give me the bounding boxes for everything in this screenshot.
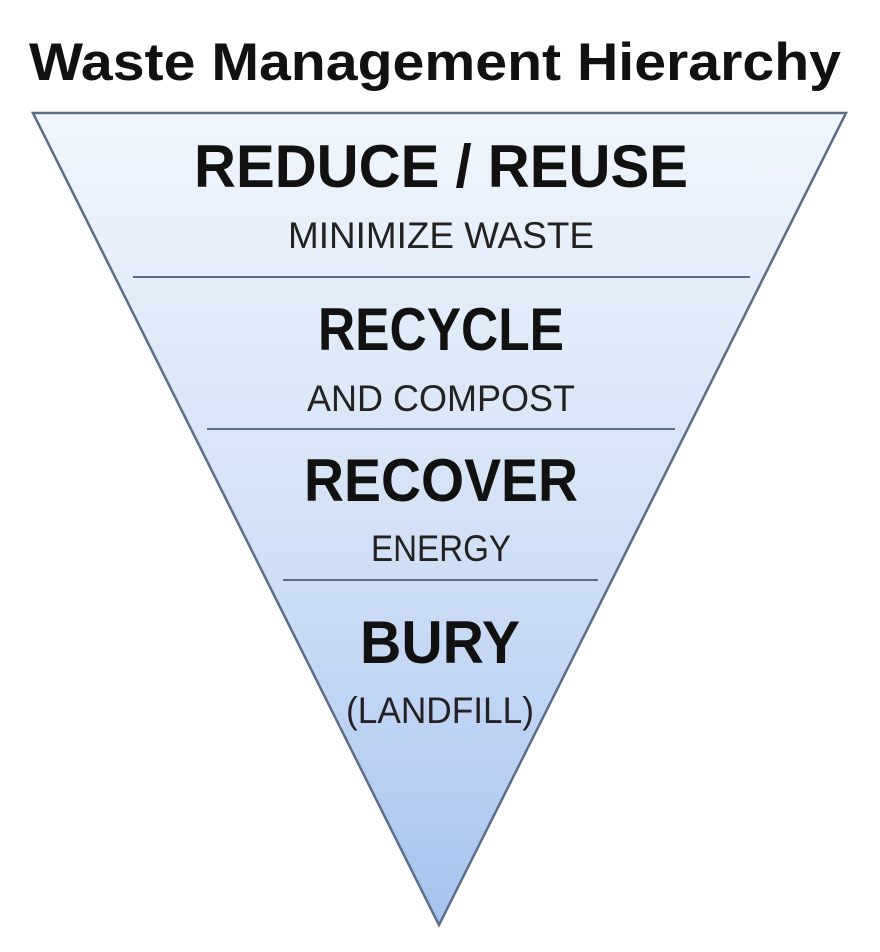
tier: recycle xyxy=(307,296,575,419)
tier: reduce / reuse: REDUCE / REUSE xyxy=(194,133,688,200)
tier: reduce / reuse: MINIMIZE WASTE xyxy=(288,215,594,256)
tier: recover: ENERGY xyxy=(371,528,511,569)
tier: recycle: AND COMPOST xyxy=(307,378,575,419)
tier: bury xyxy=(346,609,534,731)
tier: recover: RECOVER xyxy=(304,447,578,514)
tier: bury: (LANDFILL) xyxy=(346,690,534,731)
tier: recover xyxy=(304,447,578,569)
tier: reduce / reuse xyxy=(194,133,688,256)
inverted triangle xyxy=(33,113,846,925)
tier: bury: BURY xyxy=(360,609,520,676)
tier: recycle: RECYCLE xyxy=(318,296,564,363)
title: Waste Management Hierarchy xyxy=(29,33,842,92)
